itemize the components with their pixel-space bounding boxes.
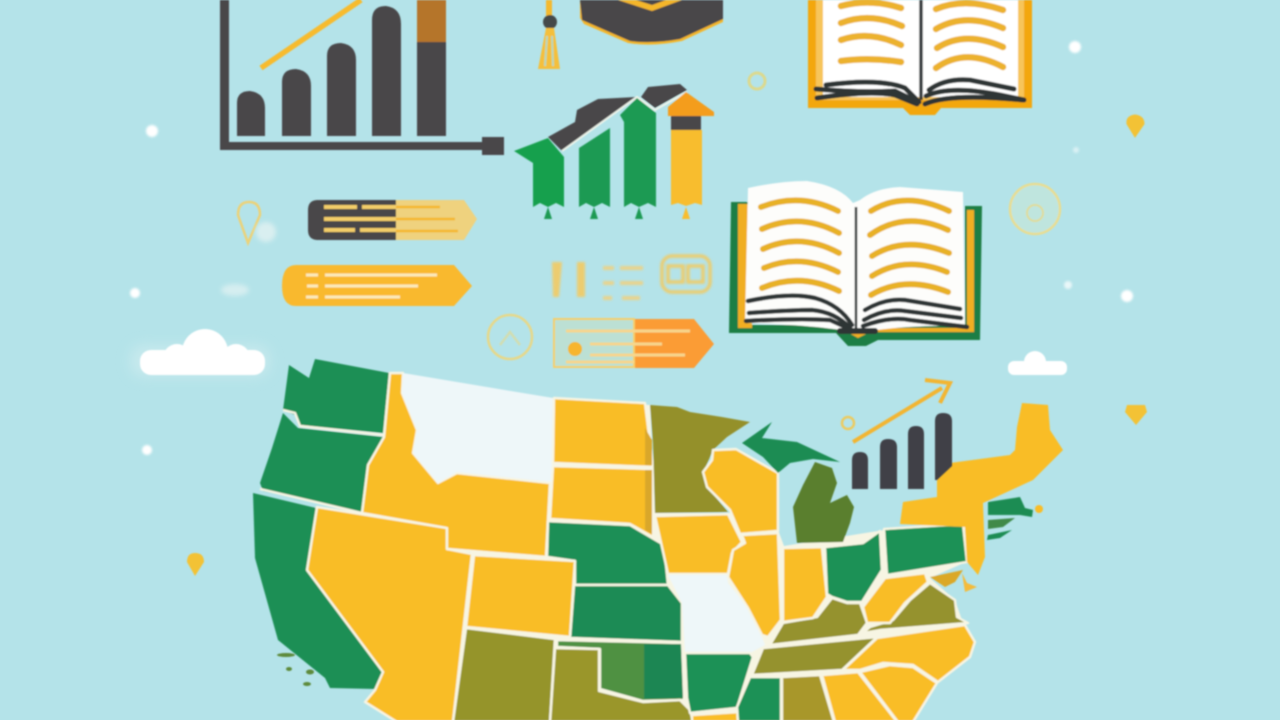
soft glow left <box>256 222 276 242</box>
cloud faint <box>221 284 249 296</box>
border: Washington Oregon <box>283 410 383 435</box>
pin gold left <box>187 553 204 576</box>
icon: open book with orange cover <box>808 0 1032 115</box>
small chart arrow <box>853 380 950 442</box>
border: Oregon California <box>260 489 362 513</box>
banner: yellow pill <box>282 265 472 306</box>
state: Ohio <box>825 531 882 602</box>
chart trend line <box>261 0 361 68</box>
chart brown bar top <box>417 0 446 42</box>
state: Oklahoma <box>557 640 684 701</box>
state: Colorado <box>466 555 575 637</box>
chart axes <box>220 0 504 155</box>
state: Minnesota <box>650 405 750 513</box>
banner: dark and yellow <box>308 200 477 240</box>
state: Nevada and Arizona <box>307 507 472 720</box>
pin outline left <box>238 202 260 243</box>
small chart bars <box>852 413 952 489</box>
state: Connecticut <box>988 518 1015 529</box>
state: Tennessee <box>752 637 877 675</box>
icon: device <box>662 256 710 292</box>
icon: graduation tassel <box>538 0 560 69</box>
banner lines <box>324 207 396 230</box>
state: Georgia <box>822 672 897 720</box>
banner: outlined orange <box>554 319 714 368</box>
map: United States <box>253 359 1063 720</box>
state: Alabama <box>782 675 834 720</box>
state: Montana <box>402 373 553 483</box>
book text lines <box>761 200 949 295</box>
pin pale top <box>749 73 765 89</box>
state: Kansas <box>570 585 682 642</box>
state: Wisconsin <box>703 449 778 534</box>
state: Iowa <box>655 514 742 574</box>
icon: small list <box>603 268 643 298</box>
state: Texas <box>550 648 693 720</box>
state: Virginia <box>863 583 968 633</box>
rising arrow bar chart <box>514 84 714 219</box>
icon: location pins <box>187 73 1147 576</box>
state: Oregon <box>260 413 383 512</box>
state: Michigan upper <box>742 422 840 473</box>
islands <box>277 653 314 686</box>
state: Massachusetts <box>988 497 1033 517</box>
state: Michigan lower <box>793 462 854 543</box>
state: South Carolina <box>860 665 937 720</box>
state: South Dakota <box>550 466 653 537</box>
icon: open book with green cover <box>729 181 982 346</box>
state: Nebraska <box>547 521 668 585</box>
orange arrow head <box>668 92 714 116</box>
state: Missouri <box>668 575 765 653</box>
border strip: Dakotas east <box>645 428 652 534</box>
state: Pennsylvania <box>884 524 967 575</box>
state: California <box>253 493 383 689</box>
yellow bar <box>671 130 702 206</box>
book page edges <box>816 80 1024 104</box>
state: Rhode Island strip <box>987 530 1012 540</box>
drips <box>544 207 552 219</box>
chart bars <box>237 6 446 136</box>
state: Idaho and Wyoming <box>362 373 550 557</box>
state: Mississippi <box>737 677 781 720</box>
state: West Virginia <box>863 573 928 623</box>
dark roof arrows <box>548 97 636 151</box>
green bars <box>514 138 564 207</box>
state: Illinois <box>728 533 781 637</box>
bar chart: top left <box>220 0 504 155</box>
icon: graduation cap <box>580 0 723 45</box>
large pale circle <box>1010 184 1060 234</box>
state: Kentucky <box>770 598 867 645</box>
map cream base <box>362 373 975 720</box>
diamond gold right <box>1125 405 1147 425</box>
small chart pin <box>842 417 854 429</box>
book page edges <box>746 296 967 331</box>
state: New Mexico <box>453 628 555 720</box>
decoration: dots <box>130 41 1133 455</box>
state: Cape Cod <box>1035 505 1043 513</box>
pill text lines <box>306 275 437 297</box>
state: New Jersey <box>962 573 977 592</box>
state: New York and New England <box>900 403 1063 575</box>
state: North Carolina <box>843 625 975 682</box>
cloud glow left <box>130 345 270 377</box>
state: Arkansas <box>685 653 753 713</box>
banner lines <box>566 331 690 362</box>
cloud left <box>140 329 265 375</box>
state: Louisiana <box>692 712 742 720</box>
state: Indiana <box>783 547 827 622</box>
decoration: clouds <box>130 284 1067 377</box>
book text lines <box>841 2 1003 68</box>
pin gold top right <box>1127 115 1144 137</box>
small bar chart over map <box>842 380 952 489</box>
dark bar band <box>671 116 701 130</box>
pale icons row <box>552 256 710 298</box>
state: Maryland <box>930 570 963 587</box>
cloud right <box>1008 351 1067 375</box>
icon: pale outlined circle left <box>488 315 532 359</box>
icon: exclamation marks <box>552 262 585 297</box>
state: Washington <box>283 359 389 433</box>
state: Oklahoma east <box>644 644 683 699</box>
state: North Dakota <box>553 398 653 467</box>
